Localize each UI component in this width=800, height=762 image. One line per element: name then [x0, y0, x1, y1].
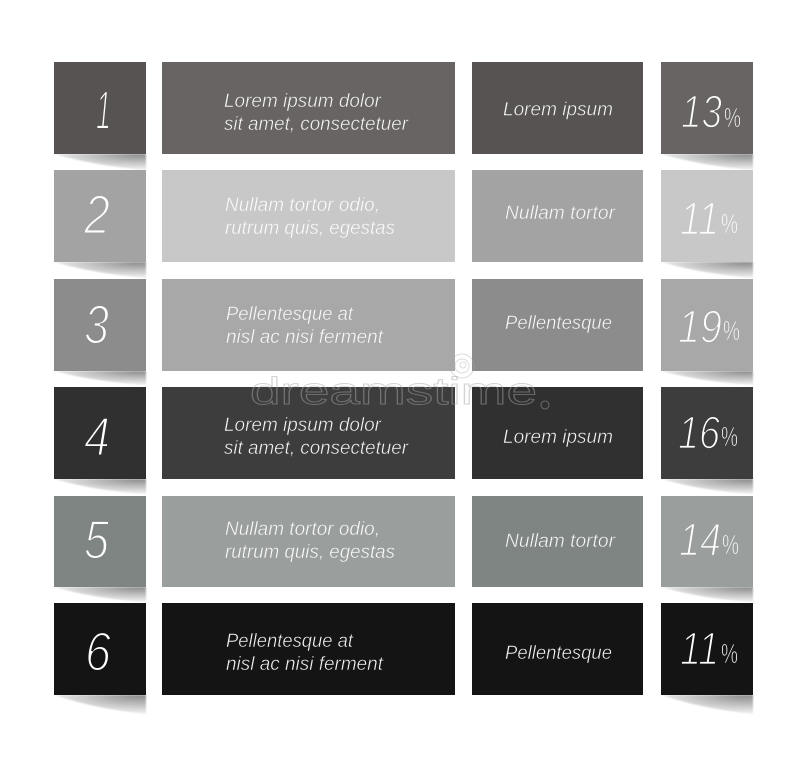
- shadow: number tab 4: [54, 479, 146, 494]
- row 1: [54, 62, 753, 170]
- shadow: percent tab 2: [661, 262, 753, 278]
- description panel 6: Pellentesque at: [226, 630, 354, 652]
- percent tab 1: 13: [681, 86, 722, 138]
- number tab 6: [54, 603, 146, 695]
- description panel 1: [162, 62, 455, 154]
- label panel 6: [472, 603, 643, 695]
- shadow: percent tab 1: [661, 154, 753, 170]
- percent tab 4: [661, 387, 753, 479]
- watermark: [250, 354, 549, 413]
- number tab 2: [54, 170, 146, 262]
- percent tab 5: %: [722, 529, 739, 560]
- label panel 6: Pellentesque: [505, 642, 612, 664]
- label panel 1: Lorem ipsum: [503, 98, 613, 120]
- description panel 1: sit amet, consectetuer: [224, 113, 409, 135]
- label panel 5: Nullam tortor: [505, 530, 616, 552]
- shadow: percent tab 6: [661, 695, 753, 714]
- percent tab 6: 11: [680, 622, 719, 674]
- percent tab 3: 19: [678, 300, 722, 352]
- description panel 3: [162, 279, 455, 371]
- row 5: [54, 496, 753, 602]
- number tab 1: 1: [96, 79, 111, 141]
- row 6: [54, 603, 753, 714]
- number tab 5: 5: [84, 508, 109, 570]
- description panel 1: Lorem ipsum dolor: [224, 90, 382, 112]
- percent tab 1: %: [724, 102, 741, 133]
- description panel 6: [162, 603, 455, 695]
- shadow: number tab 1: [54, 154, 146, 170]
- number tab 4: 4: [84, 406, 110, 468]
- percent tab 3: [661, 279, 753, 371]
- label panel 2: Nullam tortor: [505, 202, 616, 224]
- percent tab 6: %: [721, 638, 738, 669]
- description panel 6: nisl ac nisi ferment: [226, 653, 385, 675]
- shadow: number tab 2: [54, 262, 146, 278]
- description panel 3: Pellentesque at: [226, 303, 354, 325]
- label panel 3: [472, 279, 643, 371]
- description panel 5: Nullam tortor odio,: [225, 518, 380, 540]
- percent tab 1: [661, 62, 753, 154]
- shadow: number tab 3: [54, 371, 146, 385]
- description panel 2: Nullam tortor odio,: [225, 194, 380, 216]
- label panel 1: [472, 62, 643, 154]
- percent tab 3: %: [723, 315, 740, 346]
- description panel 3: nisl ac nisi ferment: [226, 326, 385, 348]
- percent tab 4: 16: [678, 406, 720, 458]
- label panel 3: Pellentesque: [505, 312, 612, 334]
- description panel 5: [162, 496, 455, 587]
- percent tab 2: %: [721, 208, 738, 239]
- number tab 5: [54, 496, 146, 587]
- label panel 5: [472, 496, 643, 587]
- row 3: [54, 279, 753, 385]
- description panel 4: Lorem ipsum dolor: [224, 414, 382, 436]
- shadow: percent tab 5: [661, 587, 753, 602]
- percent tab 5: [661, 496, 753, 587]
- number tab 3: 3: [84, 294, 109, 356]
- percent tab 2: [661, 170, 753, 262]
- number tab 2: 2: [83, 184, 110, 246]
- number tab 1: [54, 62, 146, 154]
- description panel 2: rutrum quis, egestas: [225, 217, 395, 239]
- number tab 3: [54, 279, 146, 371]
- number tab 6: 6: [85, 620, 111, 682]
- label panel 4: Lorem ipsum: [503, 426, 613, 448]
- description panel 2: [162, 170, 455, 262]
- percent tab 4: %: [721, 421, 738, 452]
- percent tab 5: 14: [679, 514, 721, 566]
- row 4: [54, 387, 753, 494]
- percent tab 6: [661, 603, 753, 695]
- percent tab 2: 11: [680, 192, 719, 244]
- shadow: number tab 6: [54, 695, 146, 714]
- label panel 4: [472, 387, 643, 479]
- shadow: percent tab 3: [661, 371, 753, 385]
- shadow: number tab 5: [54, 587, 146, 602]
- description panel 4: sit amet, consectetuer: [224, 437, 409, 459]
- watermark: dreamstime: [250, 371, 537, 413]
- description panel 5: rutrum quis, egestas: [225, 541, 395, 563]
- description panel 4: [162, 387, 455, 479]
- number tab 4: [54, 387, 146, 479]
- label panel 2: [472, 170, 643, 262]
- row 2: [54, 170, 753, 278]
- shadow: percent tab 4: [661, 479, 753, 494]
